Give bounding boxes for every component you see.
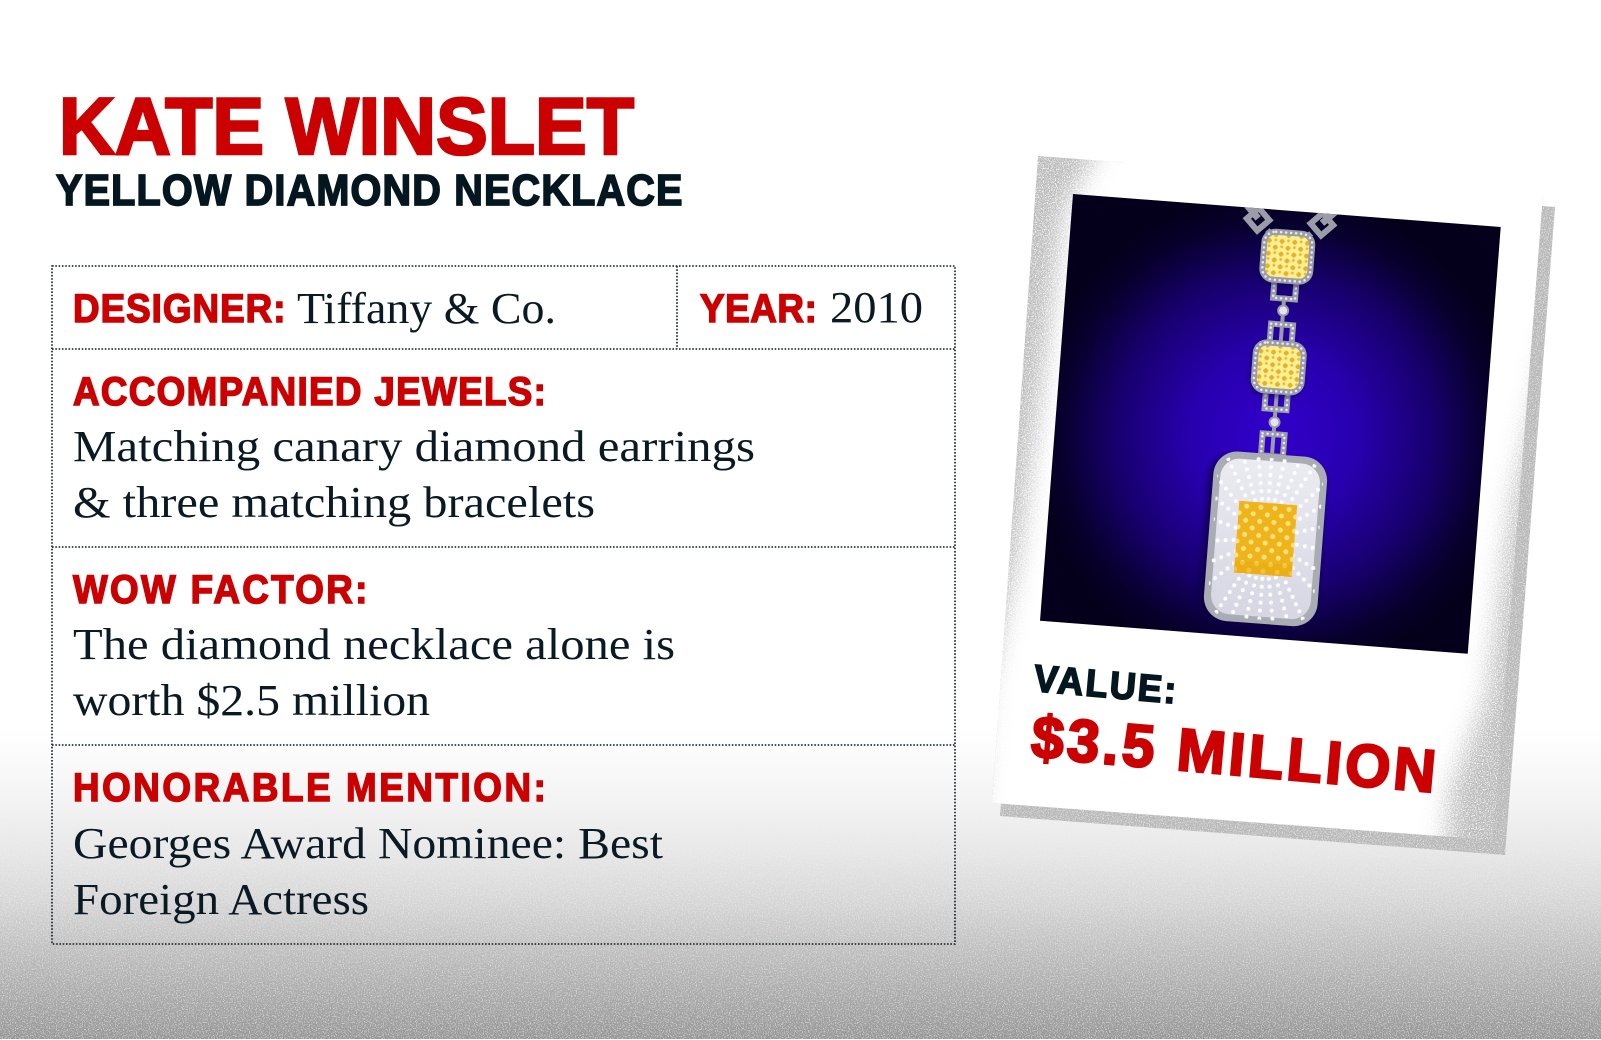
top edge highlight bbox=[1125, 162, 1543, 194]
top gem bbox=[1257, 231, 1313, 287]
title: KATE WINSLET bbox=[59, 82, 634, 172]
row: honorable mention bbox=[73, 766, 663, 924]
row: accompanied jewels: & three matching bracelets bbox=[73, 478, 595, 527]
row: designer: Tiffany & Co. bbox=[297, 284, 556, 333]
value label: VALUE: bbox=[1032, 656, 1178, 712]
row: honorable mention: Foreign Actress bbox=[73, 875, 369, 924]
yellow centre stone bbox=[1234, 501, 1297, 577]
large pendant bbox=[1197, 449, 1329, 631]
details table bbox=[52, 266, 955, 944]
round diamonds on chain bbox=[1269, 305, 1289, 428]
row: designer: DESIGNER: bbox=[73, 287, 286, 331]
polaroid card bbox=[992, 156, 1555, 855]
subtitle: YELLOW DIAMOND NECKLACE bbox=[56, 165, 682, 214]
necklace bbox=[1198, 207, 1338, 626]
row: wow factor: worth $2.5 million bbox=[73, 676, 430, 725]
row: year bbox=[700, 283, 923, 332]
row: year: YEAR: bbox=[700, 287, 817, 331]
row: year: 2010 bbox=[830, 283, 923, 332]
photo with necklace bbox=[1040, 188, 1501, 654]
row: accompanied jewels bbox=[73, 370, 755, 527]
row: accompanied jewels: ACCOMPANIED JEWELS: bbox=[73, 370, 546, 414]
row: honorable mention: Georges Award Nominee: Best bbox=[73, 819, 663, 868]
row: designer bbox=[73, 284, 556, 333]
row: wow factor: The diamond necklace alone is bbox=[73, 620, 675, 669]
row: honorable mention: HONORABLE MENTION: bbox=[73, 766, 546, 810]
chain links bbox=[1242, 207, 1338, 456]
row: accompanied jewels: Matching canary diamond earrings bbox=[73, 422, 755, 471]
card front bbox=[992, 156, 1543, 840]
card back sheet bbox=[1000, 206, 1555, 855]
row: wow factor: WOW FACTOR: bbox=[73, 568, 367, 612]
value amount: $3.5 MILLION bbox=[1029, 702, 1439, 805]
background gradient bbox=[0, 780, 1601, 1039]
clip wrapper bbox=[1198, 207, 1338, 626]
middle gem bbox=[1249, 341, 1305, 398]
row: wow factor bbox=[73, 568, 675, 725]
